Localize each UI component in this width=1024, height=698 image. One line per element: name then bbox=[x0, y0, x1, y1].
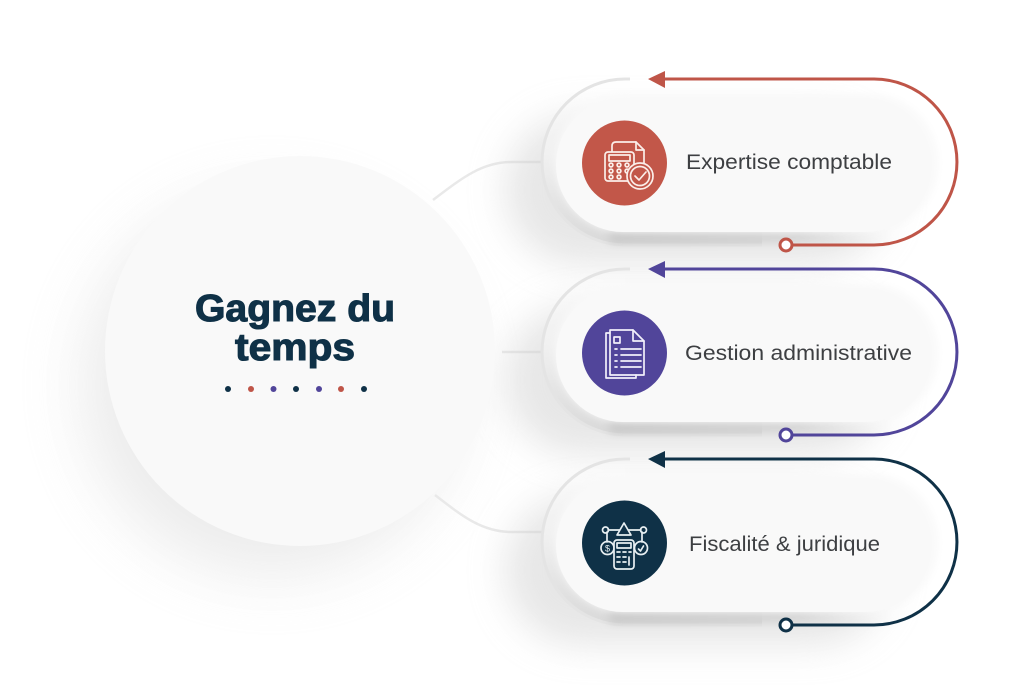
panel: Fiscalité & juridique bbox=[505, 451, 957, 645]
red arrow line bbox=[660, 79, 957, 245]
navy arrow line bbox=[660, 459, 957, 625]
panel: Gestion administrative bbox=[505, 261, 957, 455]
pill soft edge bbox=[556, 284, 938, 422]
arrowhead bbox=[648, 451, 665, 468]
panel: central circle shadow bbox=[82, 195, 462, 575]
icon: calculator with check bbox=[605, 142, 653, 189]
dot row bbox=[225, 386, 367, 392]
icon circle bbox=[582, 120, 667, 206]
grey track outline bbox=[542, 269, 762, 435]
purple arrow line bbox=[660, 269, 957, 435]
title: temps bbox=[235, 327, 355, 369]
pill body bbox=[556, 478, 932, 612]
icon: scales and calculator bbox=[601, 523, 648, 569]
pill shadow bbox=[505, 495, 890, 645]
shade under pill bbox=[610, 418, 900, 432]
panel: central circle bbox=[105, 156, 495, 546]
connector: middle link bbox=[502, 351, 543, 353]
pill shadow bbox=[505, 305, 890, 455]
pill soft edge bbox=[556, 94, 938, 232]
circle body bbox=[105, 156, 495, 546]
title bbox=[195, 288, 395, 369]
arrowhead bbox=[648, 71, 665, 88]
label: Expertise comptable bbox=[686, 150, 892, 174]
grey track crescent bbox=[542, 269, 762, 435]
arrowhead bbox=[648, 261, 665, 278]
ring marker bbox=[780, 239, 792, 251]
connector: top link bbox=[433, 162, 543, 200]
pill body bbox=[556, 98, 932, 232]
ring marker bbox=[780, 429, 792, 441]
shade under pill bbox=[610, 608, 900, 622]
grey track outline bbox=[542, 79, 762, 245]
grey track outline bbox=[542, 459, 762, 625]
connector: bottom link bbox=[435, 495, 543, 532]
icon circle bbox=[582, 310, 667, 396]
label: Fiscalité & juridique bbox=[689, 532, 880, 556]
pill soft edge bbox=[556, 474, 938, 612]
grey track crescent bbox=[542, 79, 762, 245]
grey track crescent bbox=[542, 459, 762, 625]
pill shadow bbox=[505, 115, 890, 265]
title: Gagnez du bbox=[195, 288, 395, 330]
icon: scales and calculator: $ bbox=[605, 544, 610, 554]
icon circle bbox=[582, 500, 667, 586]
icon: documents bbox=[606, 330, 644, 378]
label: Gestion administrative bbox=[685, 341, 912, 365]
panel: Expertise comptable bbox=[505, 71, 957, 265]
ring marker bbox=[780, 619, 792, 631]
shade under pill bbox=[610, 228, 900, 242]
pill body bbox=[556, 288, 932, 422]
